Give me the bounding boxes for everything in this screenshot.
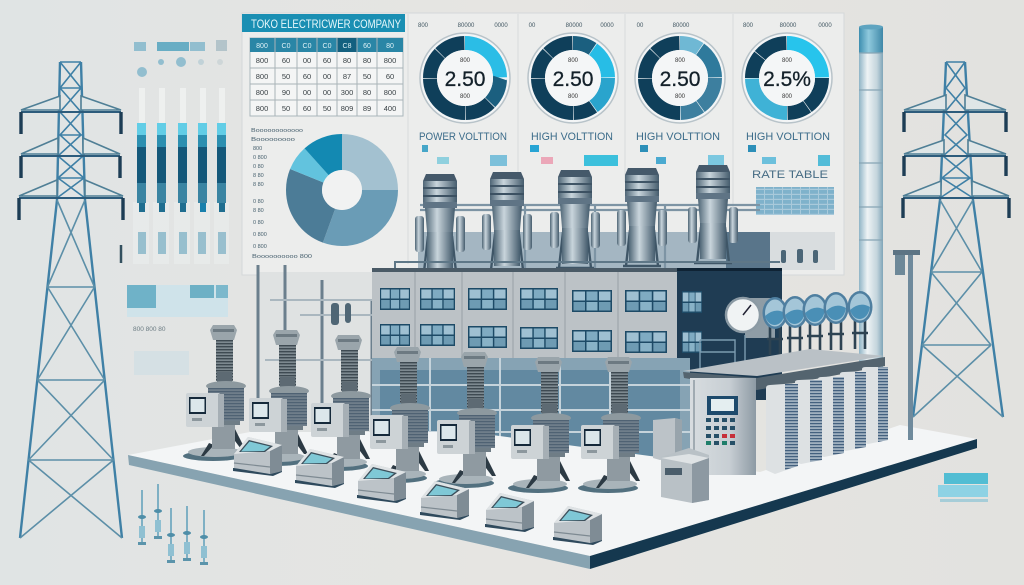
table grid: 800	[256, 43, 268, 50]
gauge: high voltage 3: 800	[782, 58, 793, 64]
table grid: 800	[256, 56, 268, 65]
insulator units	[183, 325, 641, 493]
table grid: 00	[323, 72, 331, 81]
table grid: 60	[303, 104, 311, 113]
voltage labels and chips: HIGH VOLTTION	[636, 131, 720, 143]
panel: left faded bar chart strip	[127, 40, 229, 317]
table grid: 00	[303, 56, 311, 65]
table grid: 00	[323, 88, 331, 97]
table grid: 90	[282, 88, 290, 97]
pie legend text: 8 80	[253, 173, 264, 179]
gauge: high voltage 2	[635, 23, 725, 123]
gauge: power voltage: 80000	[458, 23, 475, 29]
gauge: power voltage: 800	[460, 58, 471, 64]
pie legend text: 0 800	[253, 244, 267, 250]
voltage labels and chips: POWER VOLTTION	[419, 131, 507, 143]
gauge: high voltage 1: 00	[529, 23, 536, 29]
table grid: 50	[282, 104, 290, 113]
substation background equipment	[258, 265, 373, 442]
panel: company rate table	[242, 14, 405, 260]
table grid: 87	[343, 72, 351, 81]
light bar rails	[139, 88, 225, 124]
table grid: 809	[341, 104, 353, 113]
top icons	[134, 40, 227, 77]
table grid: 00	[303, 88, 311, 97]
table grid: 60	[386, 72, 394, 81]
gauge: power voltage: 2.50	[445, 68, 485, 91]
gauge: high voltage 3	[742, 23, 832, 123]
small floor boxes	[653, 418, 709, 503]
table grid: 60	[303, 72, 311, 81]
table grid: 60	[363, 43, 371, 50]
voltage labels and chips: HIGH VOLTTION	[746, 131, 830, 143]
gauge: power voltage: 800	[418, 23, 429, 29]
table grid: 50	[363, 72, 371, 81]
instrument gauges	[700, 291, 872, 372]
gauge: power voltage: 800	[460, 94, 471, 100]
table grid: 89	[363, 104, 371, 113]
gauge: high voltage 1: 80000	[566, 23, 583, 29]
building	[372, 268, 782, 458]
transmission tower left	[19, 62, 123, 538]
gauge: high voltage 3: 2.5%	[763, 68, 811, 91]
table grid: 60	[282, 56, 290, 65]
panel: dashboard backdrop	[242, 13, 844, 275]
pie legend text: 0 80	[253, 164, 264, 170]
gauge: high voltage 1: 2.50	[553, 68, 593, 91]
table grid: C0	[303, 43, 312, 50]
table grid: C0	[323, 43, 332, 50]
table grid: C0	[282, 43, 291, 50]
platform	[128, 425, 977, 569]
table grid: 80	[363, 88, 371, 97]
table grid: 800	[256, 72, 268, 81]
chimney	[859, 24, 883, 367]
rate table label	[752, 169, 834, 215]
table grid: 80	[343, 56, 351, 65]
side cabinets	[766, 367, 888, 474]
small insulator samples	[138, 484, 208, 565]
gauge: high voltage 3: 0000	[818, 23, 832, 29]
gauge: high voltage 3: 80000	[780, 23, 797, 29]
gauge: high voltage 2: 800	[675, 58, 686, 64]
bottom left faded note: 800 800 80	[133, 326, 166, 333]
table grid: 800	[256, 104, 268, 113]
pie legend text: Boooooooooo 800	[252, 254, 312, 260]
rate table label: RATE TABLE	[752, 169, 828, 181]
gauge: high voltage 3: 800	[743, 23, 754, 29]
pie legend text: Boooooooooooo	[251, 128, 303, 134]
table grid: 800	[384, 88, 396, 97]
table grid: 60	[323, 56, 331, 65]
table title: TOKO ELECTRICWER COMPANY	[251, 19, 401, 31]
gauge: high voltage 1: 800	[568, 58, 579, 64]
gauge: high voltage 1: 0000	[600, 23, 614, 29]
gauge: high voltage 2: 800	[675, 94, 686, 100]
voltage labels and chips	[419, 131, 830, 166]
pie legend text: 0 80	[253, 199, 264, 205]
faded lower meters	[133, 202, 229, 264]
gauge: power voltage	[418, 23, 510, 123]
power pole	[893, 250, 920, 440]
pie legend text: 8 80	[253, 208, 264, 214]
gauge: high voltage 2: 80000	[673, 23, 690, 29]
pie legend text	[251, 128, 312, 260]
gauge: high voltage 2: 2.50	[660, 68, 700, 91]
gauge: power voltage: 0000	[494, 23, 508, 29]
control boxes	[233, 437, 602, 545]
table grid: C8	[343, 43, 352, 50]
table grid: 300	[341, 88, 353, 97]
bottom right card	[938, 473, 988, 502]
pie legend text: 0 80	[253, 220, 264, 226]
gauge: high voltage 3: 800	[782, 94, 793, 100]
table title	[242, 14, 405, 32]
table grid: 50	[323, 104, 331, 113]
table grid: 50	[282, 72, 290, 81]
pie legend text: 0 800	[253, 155, 267, 161]
gauge: high voltage 2: 00	[637, 23, 644, 29]
table grid: 80	[363, 56, 371, 65]
rear processing plant	[395, 165, 835, 272]
table grid: 800	[384, 56, 396, 65]
control cabinet	[683, 349, 885, 475]
transmission tower right	[903, 62, 1009, 417]
bottom left faded note	[133, 326, 189, 375]
pie legend text: 8 80	[253, 182, 264, 188]
pie legend text: 800	[253, 146, 262, 152]
table grid: 400	[384, 104, 396, 113]
gauge: high voltage 1: 800	[568, 94, 579, 100]
gauge: high voltage 1	[528, 23, 618, 123]
table grid: 80	[386, 43, 394, 50]
table grid: 800	[256, 88, 268, 97]
pie legend text: 0 800	[253, 232, 267, 238]
voltage labels and chips: HIGH VOLTTION	[531, 131, 613, 143]
bottom cards	[127, 285, 228, 317]
table grid	[250, 38, 403, 116]
pie legend text: Booooooooo	[251, 137, 295, 143]
bars	[137, 123, 226, 212]
pie chart	[304, 152, 380, 228]
